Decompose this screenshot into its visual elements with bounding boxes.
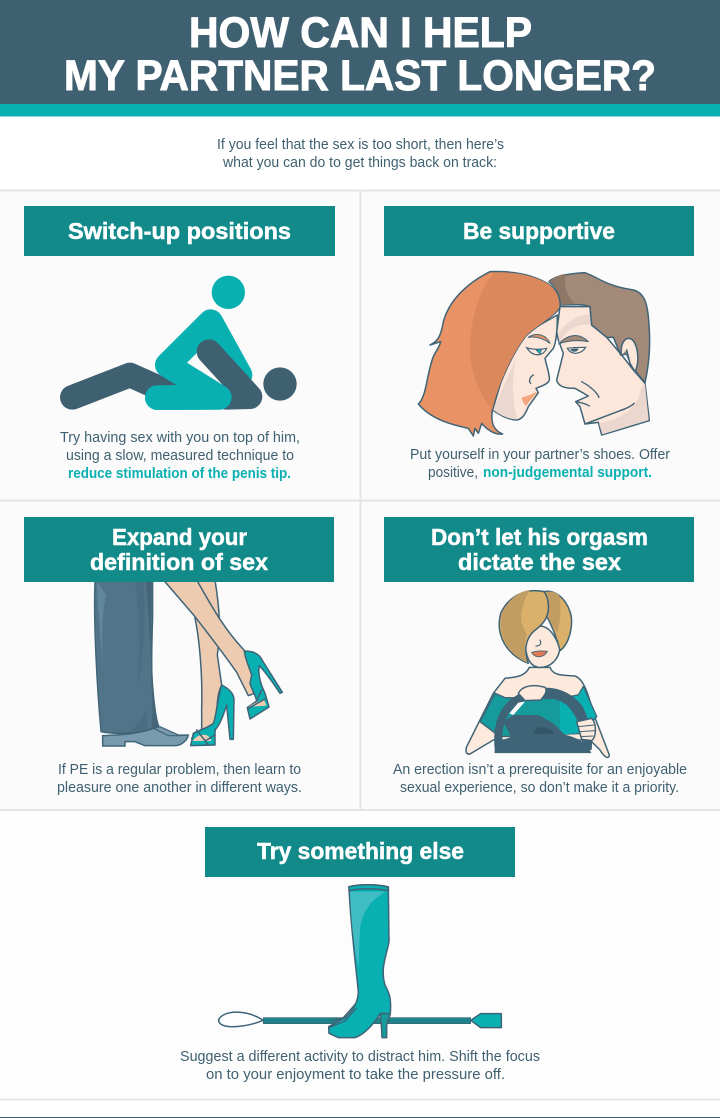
- heading: definition of sex: [90, 549, 268, 575]
- title: MY PARTNER LAST LONGER?: [64, 52, 656, 100]
- panel: be supportive: [384, 206, 694, 481]
- body text: [180, 1049, 540, 1083]
- heading: Switch-up positions: [68, 218, 291, 244]
- heading: [24, 206, 335, 256]
- title: [64, 9, 656, 100]
- panel: switch-up positions: [24, 206, 335, 482]
- heading: Don’t let his orgasm: [431, 524, 648, 550]
- body text: If PE is a regular problem, then learn to: [58, 762, 301, 778]
- body text: An erection isn’t a prerequisite for an enjoyable: [393, 762, 687, 778]
- body text: Try having sex with you on top of him,: [60, 430, 300, 446]
- heading: dictate the sex: [458, 549, 621, 575]
- icon: couple position figures: [72, 276, 297, 401]
- body text: using a slow, measured technique to: [66, 448, 294, 464]
- body text: [393, 762, 687, 796]
- body text: [410, 447, 670, 481]
- heading: [205, 827, 515, 877]
- intro text: what you can do to get things back on track:: [222, 155, 497, 171]
- header banner: [0, 0, 720, 117]
- body text: [57, 762, 302, 796]
- body text: sexual experience, so don’t make it a priority.: [400, 780, 679, 796]
- heading: [24, 517, 334, 582]
- body text: positive,: [428, 465, 478, 481]
- icon: two faces: [418, 272, 650, 436]
- body text: Put yourself in your partner’s shoes. Offer: [410, 447, 670, 463]
- heading: Expand your: [112, 524, 247, 550]
- icon: legs and heels: [95, 580, 282, 746]
- body text: Suggest a different activity to distract him. Shift the focus: [180, 1049, 540, 1065]
- icon: boot and riding crop: [219, 885, 501, 1038]
- title: HOW CAN I HELP: [189, 9, 532, 57]
- heading: [384, 206, 694, 256]
- panel: expand your definition of sex: [24, 517, 334, 796]
- intro text: [217, 137, 504, 171]
- intro text: If you feel that the sex is too short, then here’s: [217, 137, 504, 153]
- heading: [384, 517, 694, 582]
- body text: [60, 430, 300, 482]
- heading: Try something else: [257, 838, 464, 864]
- heading: Be supportive: [463, 218, 615, 244]
- panel: don't let his orgasm dictate the sex: [384, 517, 694, 796]
- panel: try something else: [180, 827, 540, 1083]
- body text: reduce stimulation of the penis tip.: [68, 466, 291, 482]
- body text: on to your enjoyment to take the pressure off.: [206, 1067, 505, 1083]
- body text: pleasure one another in different ways.: [57, 780, 302, 796]
- icon: woman driving: [466, 591, 609, 757]
- body text: non-judgemental support.: [483, 465, 652, 481]
